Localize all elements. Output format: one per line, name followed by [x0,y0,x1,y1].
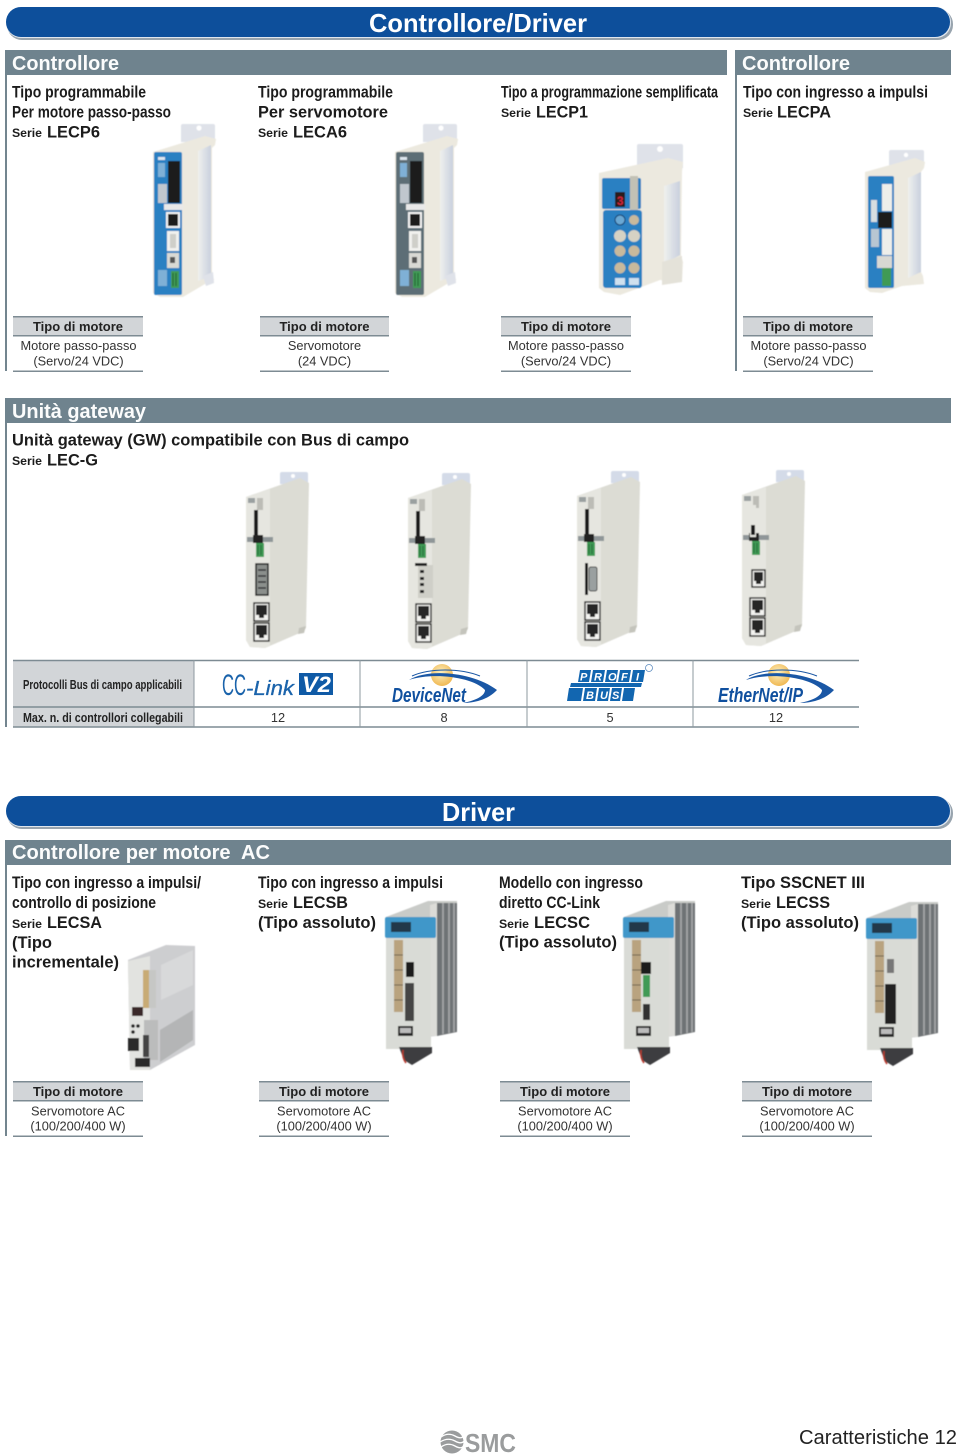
description LECP6: Tipo programmabile [12,84,146,102]
panel: Controllore programmabile [5,50,727,372]
description LECP6: Per motore passo-passo [12,104,171,122]
table: motor type LECSB [259,1081,389,1137]
logo: CC-Link V2 [222,669,333,702]
description LECPA: Tipo con ingresso a impulsi [743,84,928,102]
panel: Controllore con ingresso a impulsi [735,50,951,372]
description LECSA: Serie [12,917,42,931]
description LECSB [258,874,443,932]
product LECSS [741,874,938,1137]
table: motor type LECSB: Tipo di motore [279,1084,369,1099]
table: motor type LECSS [742,1081,872,1137]
product LECP6 [12,84,216,372]
description LECSS [741,874,865,932]
image: driver LECSB [385,901,457,1065]
product LECSA [12,874,201,1137]
logo: SMC [440,1428,516,1456]
table: fieldbus protocols: Protocolli Bus di campo applicabili [23,677,182,692]
table: fieldbus protocols: 12 [769,710,783,725]
description LECSS: (Tipo assoluto) [741,914,859,932]
logo: PROFIBUS: R [594,672,602,684]
description LECSA [12,874,201,972]
heading: Controllore: Controllore [742,53,850,75]
description LECSB: (Tipo assoluto) [258,914,376,932]
description LECSC: Serie [499,917,529,931]
table: motor type LECP6: (Servo/24 VDC) [33,354,124,368]
product LECSC [499,874,695,1137]
description LECA6: Tipo programmabile [258,84,393,102]
page footer: Caratteristiche 12 [799,1427,957,1449]
logo: CC-Link V2: V2 [302,672,332,697]
heading: Controllore per motore AC: Controllore per motore AC [12,842,270,864]
logo: CC-Link V2: CC [222,669,246,702]
description LECP1 [501,84,719,122]
logo: PROFIBUS: F [621,672,628,684]
image: controller LECPA [865,150,925,293]
description LECSA: Tipo con ingresso a impulsi/ [12,874,201,892]
product LECSB [258,874,457,1137]
product LECP1 [501,84,719,372]
image: controller LECP6 [153,124,216,297]
table: motor type LECPA [743,316,873,372]
description LECSS: LECSS [776,894,830,912]
table: motor type LECSS: (100/200/400 W) [759,1118,855,1134]
table: motor type LECA6: Servomotore [288,338,361,353]
description LEC-G: Unità gateway (GW) compatibile con Bus di campo [12,432,409,450]
table: motor type LECP6: Motore passo-passo [21,338,136,353]
table: motor type LECSS: Tipo di motore [762,1084,852,1099]
image: gateway CC-Link [246,472,309,648]
title bar: Driver: Driver [442,797,515,827]
description LEC-G: Serie [12,454,42,468]
table: fieldbus protocols: 8 [440,710,448,725]
description LECA6: LECA6 [293,124,347,142]
description LECP6: Serie [12,126,42,140]
table: motor type LECSC: (100/200/400 W) [517,1118,613,1134]
image: controller LECA6 [395,124,458,297]
image: driver LECSS [866,902,938,1066]
table: motor type LECP1: Tipo di motore [521,319,611,334]
table: motor type LECSA: (100/200/400 W) [30,1118,126,1134]
table: motor type LECP6: Tipo di motore [33,319,123,334]
description LECSC: diretto CC-Link [499,894,601,912]
image: driver LECSC [623,901,695,1065]
description LEC-G [12,432,409,470]
title bar: Controllore/Driver: Controllore/Driver [369,8,587,38]
logo: PROFIBUS [567,664,652,702]
table: motor type LECP1 [501,316,631,372]
table: motor type LECSC [500,1081,630,1137]
logo: PROFIBUS: O [608,672,617,684]
description LECSC [499,874,643,952]
description LECSA: (Tipo [12,934,52,952]
description LECSC: LECSC [534,914,590,932]
table: fieldbus protocols: Max. n. di controllori collegabili [23,710,183,725]
logo: PROFIBUS: B [586,690,594,702]
table: motor type LECSA: Servomotore AC [31,1104,125,1118]
description LECSA: LECSA [47,914,102,932]
table: motor type LECP1: (Servo/24 VDC) [521,354,611,368]
description LECSC: (Tipo assoluto) [499,934,617,952]
logo: CC-Link V2: -Link [246,678,295,700]
logo: DeviceNet: DeviceNet [392,685,467,707]
panel: Controllore per motore AC [5,840,951,1137]
table: motor type LECPA: Tipo di motore [763,319,853,334]
logo: EtherNet/IP [718,664,834,707]
table: motor type LECSA: Tipo di motore [33,1084,123,1099]
description LECSB: LECSB [293,894,348,912]
description LECP6: LECP6 [47,124,100,142]
logo: EtherNet/IP: EtherNet/IP [718,685,804,707]
image: gateway EtherNet/IP [742,470,805,646]
image: gateway DeviceNet [408,473,471,649]
description LECP6 [12,84,171,142]
table: fieldbus protocols: 12 [271,710,285,725]
table: motor type LECA6 [260,316,389,372]
table: motor type LECA6: (24 VDC) [298,354,351,368]
description LECSA: incrementale) [12,954,119,972]
description LECSA: controllo di posizione [12,894,156,912]
table: motor type LECPA: Motore passo-passo [751,338,866,353]
table: motor type LECP6 [13,316,143,372]
product LECA6 [258,84,458,372]
table: motor type LECA6: Tipo di motore [279,319,370,334]
table: fieldbus protocols: 5 [606,710,614,725]
logo: PROFIBUS: P [580,672,588,684]
image: gateway PROFIBUS [577,471,640,647]
table: motor type LECSB: (100/200/400 W) [276,1118,372,1134]
heading: Controllore: Controllore [12,53,119,75]
title bar: Controllore/Driver [6,7,953,40]
description LECA6: Serie [258,126,288,140]
table: motor type LECSB: Servomotore AC [277,1104,371,1118]
description LECSS: Serie [741,897,771,911]
panel: Unità gateway [5,398,951,727]
heading: Unità gateway: Unità gateway [12,401,147,423]
description LECA6 [258,84,393,142]
table: motor type LECSS: Servomotore AC [760,1104,854,1118]
description LECSC: Modello con ingresso [499,874,643,892]
logo: PROFIBUS: S [612,690,620,702]
table: motor type LECSC: Servomotore AC [518,1104,612,1118]
table: motor type LECPA: (Servo/24 VDC) [763,354,854,368]
logo: PROFIBUS: I [636,672,640,684]
description LECSB: Serie [258,897,288,911]
logo: DeviceNet [392,664,497,707]
logo: PROFIBUS: U [600,690,609,702]
image: controller LECP1 [599,144,683,295]
description LECA6: Per servomotore [258,104,388,122]
description LECPA: Serie [743,106,773,120]
table: fieldbus protocols [13,660,859,727]
image: controller LECP1: 3 [617,194,624,208]
title bar: Driver [6,796,953,829]
table: motor type LECSA [13,1081,143,1137]
table: motor type LECSC: Tipo di motore [520,1084,610,1099]
description LECP1: Tipo a programmazione semplificata [501,84,719,102]
image: driver LECSA [128,945,195,1070]
description LECP1: LECP1 [536,104,588,122]
description LECSB: Tipo con ingresso a impulsi [258,874,443,892]
description LEC-G: LEC-G [47,452,98,470]
description LECPA: LECPA [777,104,831,122]
description LECP1: Serie [501,106,531,120]
table: motor type LECP1: Motore passo-passo [508,338,624,353]
description LECPA [743,84,928,122]
description LECSS: Tipo SSCNET III [741,874,865,892]
